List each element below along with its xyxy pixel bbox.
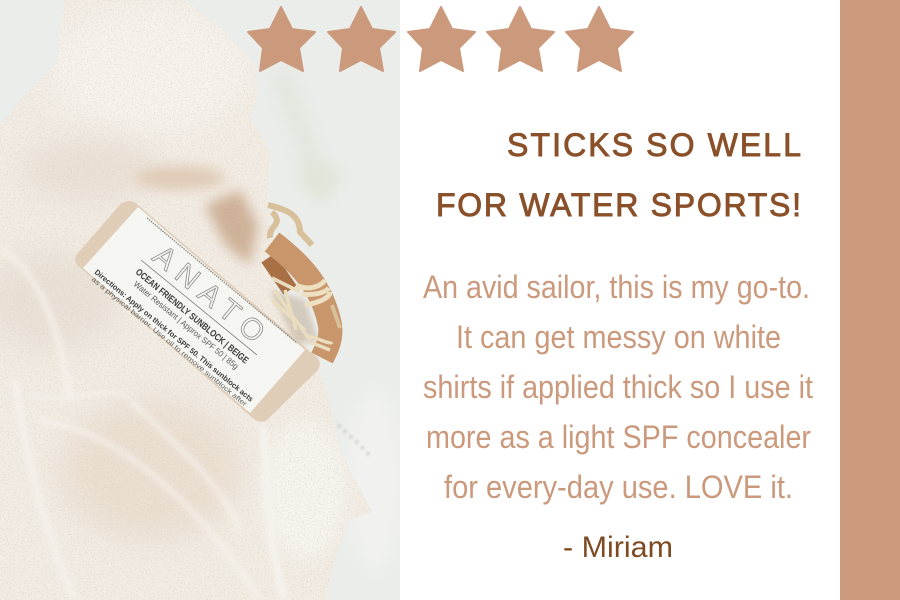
- review text: It can get messy on white: [456, 319, 781, 355]
- basket with wooden handle: [268, 205, 340, 358]
- side colour bar: [840, 0, 900, 600]
- product label: OCEAN FRIENDLY SUNBLOCK | BEIGE: [133, 267, 250, 366]
- marble background: [0, 0, 405, 600]
- five star rating: [248, 7, 633, 71]
- product label: Water Resistant | Approx SPF 50 | 85g: [132, 279, 241, 371]
- product label: Directions: Apply on thick for SPF 50. This sunblock acts: [93, 268, 255, 404]
- review text: shirts if applied thick so I use it: [423, 369, 813, 405]
- heading: STICKS SO WELL: [507, 127, 801, 163]
- heading: [436, 127, 801, 223]
- heading: FOR WATER SPORTS!: [436, 187, 801, 223]
- gauze cloth: [0, 0, 400, 600]
- photo: sunblock tube on gauze over marble: [0, 0, 405, 600]
- review text: An avid sailor, this is my go-to.: [423, 269, 810, 305]
- review text: [423, 269, 813, 505]
- sunblock tube: [75, 201, 320, 422]
- review text: more as a light SPF concealer: [426, 419, 811, 455]
- reviewer name: - Miriam: [563, 531, 673, 564]
- product label: as a physical barrier. Use oil to remove sunblock after: [90, 276, 248, 409]
- brand logo: ANATO: [147, 239, 271, 350]
- review text: for every-day use. LOVE it.: [444, 469, 793, 505]
- product label: [83, 207, 305, 413]
